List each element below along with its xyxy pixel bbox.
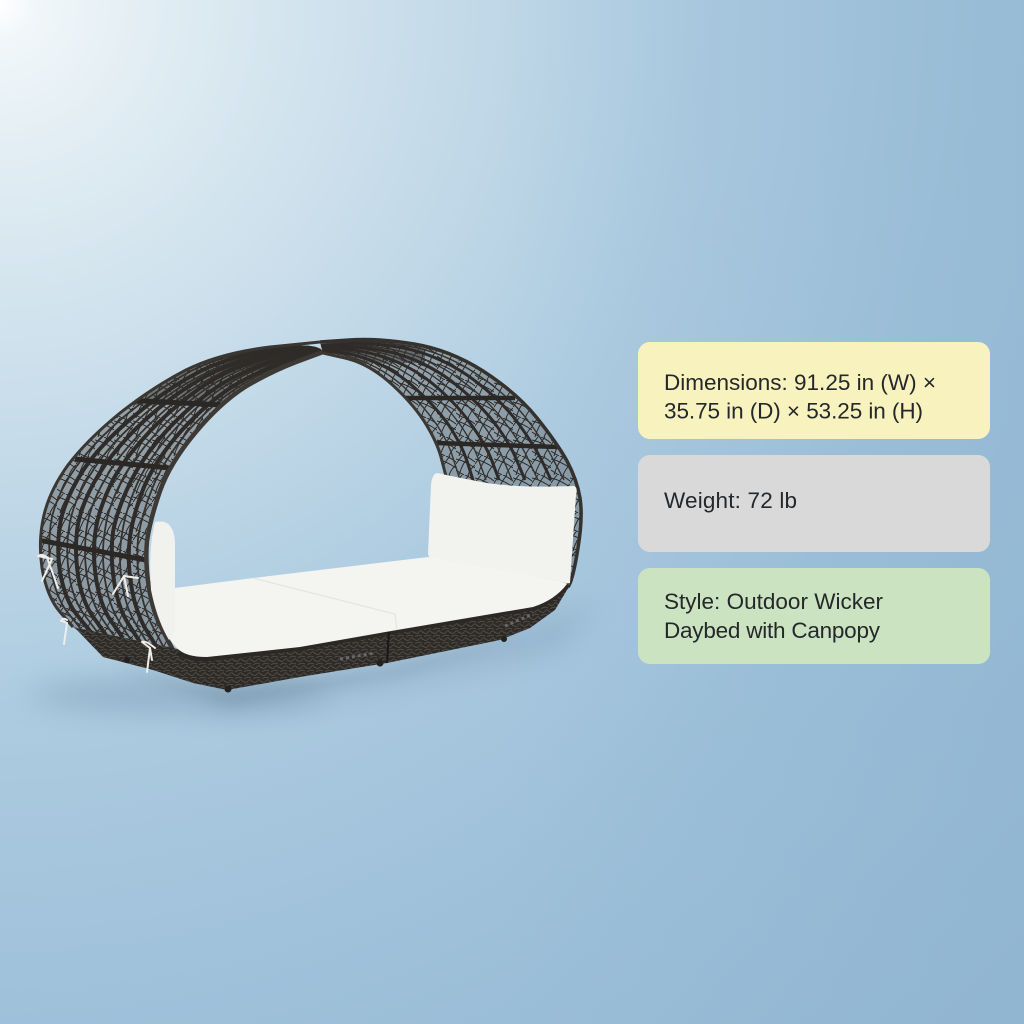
side cushion: [150, 522, 175, 640]
card: weight: [638, 455, 990, 552]
daybed product illustration: [30, 335, 600, 713]
card: style: [638, 568, 990, 664]
back cushion: [428, 473, 577, 583]
card: dimensions: 35.75 in (D) × 53.25 in (H): [664, 398, 923, 424]
seat cushions: [170, 557, 567, 657]
card: dimensions: Dimensions: 91.25 in (W) ×: [664, 370, 936, 395]
card: weight: Weight: 72 lb: [664, 488, 797, 513]
white ties: [38, 555, 155, 672]
cross bars right: [405, 398, 559, 447]
feet: [124, 636, 507, 692]
card: dimensions: [638, 342, 990, 439]
canopy right panel lattice: [315, 335, 590, 590]
canopy left panel lattice: [30, 335, 330, 655]
right rims: [320, 340, 581, 587]
left rims: [40, 342, 320, 627]
ground shadow: [30, 600, 600, 713]
card: style: Style: Outdoor Wicker: [664, 589, 884, 614]
card: style: Daybed with Canpopy: [664, 618, 881, 643]
woven base: [73, 580, 573, 690]
cross bars left: [38, 400, 222, 560]
